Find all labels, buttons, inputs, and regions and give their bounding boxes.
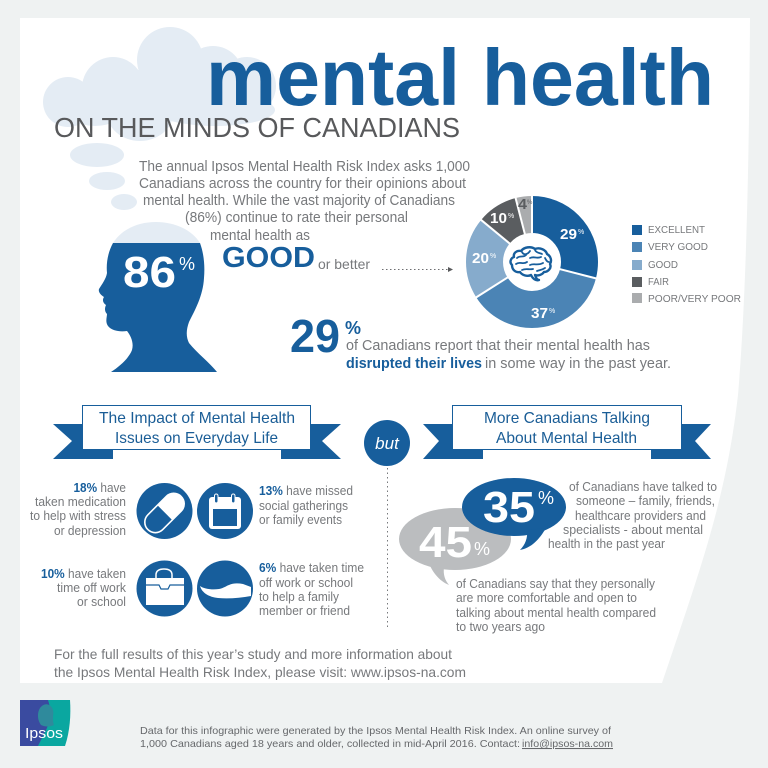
callout: 29 percent disrupted: in some way in the past year.	[485, 356, 671, 372]
text: 10 percent time off: time off work	[57, 581, 127, 595]
ribbon heading: impact	[53, 406, 341, 459]
divider	[386, 468, 388, 628]
icon: Ipsos logo: Ipsos	[25, 725, 63, 742]
pie value labels: %	[549, 308, 555, 315]
arrow: dotted to pie	[382, 267, 453, 272]
text: 35 percent description: specialists - about mental	[563, 523, 703, 537]
but badge	[364, 420, 410, 466]
icon: brain	[511, 247, 551, 280]
subtitle: ON THE MINDS OF CANADIANS	[54, 112, 460, 143]
intro text: (86%) continue to rate their personal	[185, 210, 408, 226]
text: 35 percent description	[548, 480, 717, 551]
text: 18 percent medication: taken medication	[35, 495, 126, 509]
speech bubble: 35 percent	[462, 478, 566, 550]
text: 13 percent social: 13% have missed	[259, 484, 353, 498]
icon: head silhouette with 86%	[99, 222, 217, 372]
callout: 29 percent disrupted: disrupted their lives	[346, 356, 482, 372]
speech bubble: 45 percent: 45	[419, 518, 472, 567]
pie value labels: %	[508, 213, 514, 220]
pie value labels: 10	[490, 211, 507, 227]
pie chart	[472, 193, 598, 322]
pie value labels: %	[490, 253, 496, 260]
text: data source note	[140, 725, 613, 750]
icon: head silhouette with 86%: 86	[123, 248, 176, 297]
text: further information	[54, 646, 466, 680]
intro text	[139, 159, 470, 244]
pie value labels: 37	[531, 306, 548, 322]
intro text: mental health as	[210, 228, 310, 244]
text: 10 percent time off: or school	[77, 595, 126, 609]
text: 45 percent description: to two years ago	[456, 620, 545, 634]
pie legend: VERY GOOD	[648, 241, 708, 253]
pie legend	[632, 224, 741, 305]
ribbon heading: talking	[423, 406, 711, 459]
text: 45 percent description: of Canadians say that they personally	[456, 577, 656, 591]
text: 35 percent description: healthcare providers and	[575, 509, 706, 523]
title: mental health	[206, 33, 714, 122]
pie legend: EXCELLENT	[648, 224, 706, 236]
pie legend: GOOD	[648, 259, 678, 271]
callout: 29 percent disrupted: 29	[290, 310, 340, 362]
pie value labels: 4	[518, 197, 527, 213]
speech bubble: 35 percent: 35	[483, 483, 535, 532]
text: 13 percent social: or family events	[259, 513, 342, 527]
pie legend: POOR/VERY POOR	[648, 293, 741, 305]
intro text: Canadians across the country for their opinions about	[139, 176, 466, 192]
text: 10 percent time off: 10% have taken	[41, 567, 126, 581]
text: data source note: Data for this infographic were generated by the Ipsos Mental Health Risk Index. An online survey of	[140, 725, 611, 737]
text: 6 percent family: member or friend	[259, 604, 350, 618]
text: 45 percent description: are more comfortable and open to	[456, 591, 637, 605]
but badge: but	[375, 434, 400, 453]
good or better heading: GOOD	[222, 242, 315, 274]
text: further information: For the full results of this year’s study and more information about	[54, 646, 452, 662]
speech bubble: 35 percent: %	[538, 488, 554, 508]
text: 35 percent description: health in the past year	[548, 537, 665, 551]
pie value labels: 29	[560, 227, 577, 243]
icon: thought cloud	[43, 27, 276, 210]
callout: 29 percent disrupted	[290, 310, 671, 372]
text: 6 percent family: off work or school	[259, 576, 353, 590]
text: 13 percent social: social gatherings	[259, 499, 348, 513]
speech bubble: 45 percent: %	[474, 539, 490, 559]
text: 10 percent time off	[41, 567, 127, 609]
text: data source note: info@ipsos-na.com	[522, 738, 613, 750]
text: 6 percent family: 6% have taken time	[259, 561, 364, 575]
ribbon heading: impact: Issues on Everyday Life	[115, 430, 278, 447]
pie value labels: 20	[472, 251, 489, 267]
text: 13 percent social	[259, 484, 353, 527]
icon: head silhouette with 86%: %	[179, 254, 195, 274]
ribbon heading: talking: About Mental Health	[496, 430, 637, 447]
pie value labels: %	[578, 229, 584, 236]
pie value labels: %	[527, 200, 533, 206]
intro text: mental health. While the vast majority of Canadians	[143, 193, 455, 209]
text: 18 percent medication: 18% have	[74, 481, 126, 495]
icon: pill	[136, 483, 192, 539]
text: 35 percent description: of Canadians have talked to	[569, 480, 717, 494]
good or better heading: or better	[318, 256, 370, 272]
text: 18 percent medication: or depression	[54, 524, 126, 538]
text: 18 percent medication	[30, 481, 126, 538]
callout: 29 percent disrupted: of Canadians report that their mental health has	[346, 338, 650, 354]
intro text: The annual Ipsos Mental Health Risk Index asks 1,000	[139, 159, 470, 175]
text: data source note: 1,000 Canadians aged 18 years and older, collected in mid-April 2016. Contact:	[140, 738, 520, 750]
text: 35 percent description: someone – family, friends,	[576, 494, 715, 508]
icon: calendar	[197, 483, 253, 539]
icon: briefcase	[136, 560, 192, 616]
icon: shoe	[197, 560, 253, 616]
text: 18 percent medication: to help with stress	[30, 509, 126, 523]
text: further information: the Ipsos Mental Health Risk Index, please visit: www.ipsos-na.com	[54, 664, 466, 680]
text: 45 percent description	[456, 577, 656, 634]
callout: 29 percent disrupted: %	[345, 318, 361, 338]
ribbon heading: talking: More Canadians Talking	[484, 410, 650, 427]
icon: Ipsos logo	[20, 700, 70, 746]
text: 45 percent description: talking about mental health compared	[456, 606, 656, 620]
speech bubble: 45 percent	[399, 508, 511, 585]
ribbon heading: impact: The Impact of Mental Health	[99, 410, 295, 427]
text: 6 percent family: to help a family	[259, 590, 340, 604]
pie legend: FAIR	[648, 276, 669, 288]
text: 6 percent family	[259, 561, 364, 618]
good or better heading	[222, 242, 370, 274]
pie value labels	[472, 197, 584, 322]
